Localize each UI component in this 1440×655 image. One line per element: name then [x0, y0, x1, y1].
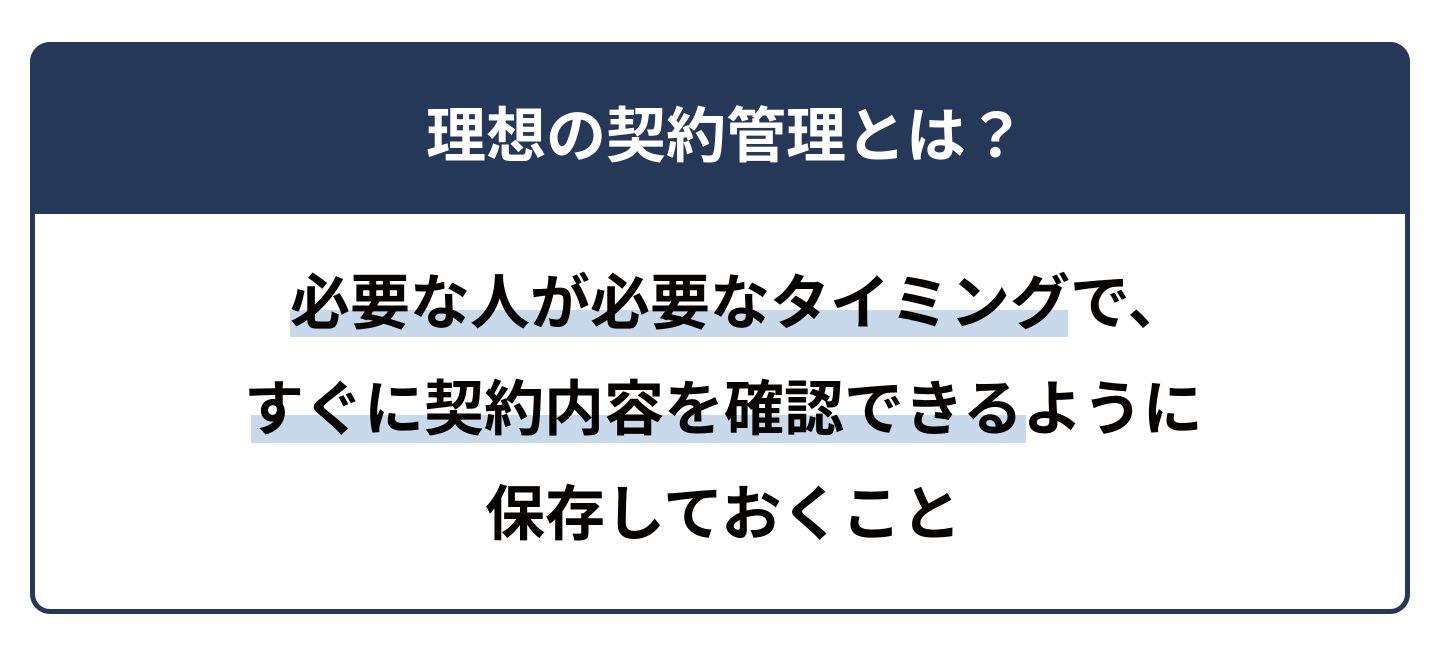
panel header band	[30, 42, 1410, 214]
text: line 1: 必要な人が必要なタイミングで、	[290, 270, 1188, 337]
highlight: first line	[290, 310, 1068, 336]
text: line 3: 保存しておくこと	[485, 481, 961, 548]
title: 理想の契約管理とは？	[426, 103, 1026, 170]
text: line 2: すぐに契約内容を確認できるように	[244, 376, 1203, 443]
highlight: second line	[251, 415, 1026, 443]
